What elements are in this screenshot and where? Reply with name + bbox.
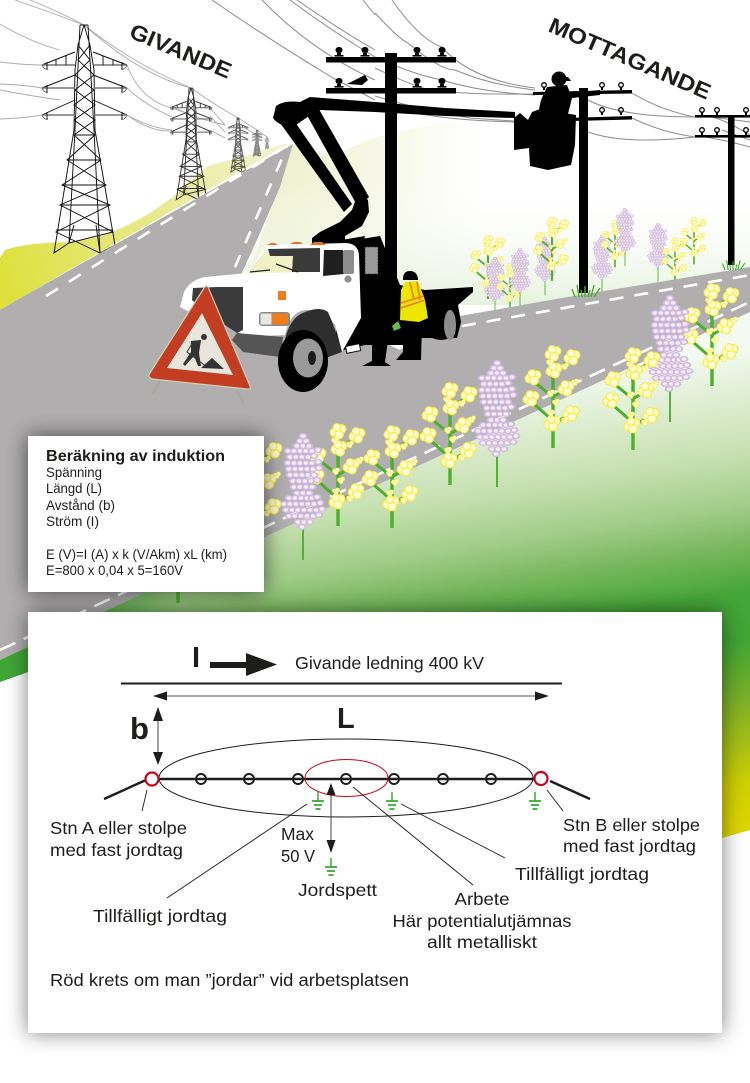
pole 3 with cross arms [695, 108, 750, 265]
list of quantities: Längd (L) [46, 480, 102, 496]
label: MOTTAGANDE: MOTTAGANDE [545, 13, 715, 104]
worker in safety vest [392, 271, 428, 360]
truck marker light [278, 291, 286, 300]
truck body behind cab [335, 236, 473, 352]
label b: b [130, 711, 149, 746]
station A [146, 772, 158, 786]
text: Arbete: allt metalliskt [427, 932, 537, 952]
truck rear wheel rim [444, 310, 456, 340]
leader lines [142, 787, 563, 898]
text: Stn B [563, 815, 700, 856]
panel: calculation shadow [28, 436, 264, 592]
small flowers behind the road [469, 208, 707, 315]
arrow: distance b [153, 707, 163, 765]
black induction loop [159, 739, 533, 817]
tower 2 [170, 88, 212, 200]
hill: pale green roadside on the right [240, 180, 750, 305]
tower 1 [42, 25, 127, 253]
tower 3 [228, 118, 248, 172]
tower 4 [252, 130, 262, 156]
truck grille [192, 287, 243, 333]
text: Stn B: med fast jordtag [563, 836, 696, 856]
formula: E (V)=I (A) x k (V/Akm) xL (km) [46, 546, 227, 562]
text: Stn A [50, 818, 187, 860]
text: Arbete [392, 889, 572, 952]
green ground at far left [0, 576, 180, 692]
pole 2 with cross arms [533, 83, 632, 293]
panel: diagram [28, 612, 722, 1033]
induced line with poles [104, 774, 590, 799]
text: max 50 V: 50 V [281, 846, 315, 866]
list of quantities: Spänning [46, 464, 102, 480]
bucket truck boom and arms [273, 97, 515, 250]
truck bumper [232, 333, 283, 357]
label: GIVANDE: GIVANDE [126, 19, 235, 83]
warning triangle sign [149, 286, 250, 407]
list of quantities [46, 464, 115, 529]
text: Stn A: med fast jordtag [50, 840, 183, 860]
power wires: transmission line [0, 0, 267, 138]
text: red circuit note: Röd krets om man ”jordar” vid arbetsplatsen [50, 970, 409, 990]
text: Givande ledning: Givande ledning 400 kV [295, 653, 484, 673]
formula: E=800 x 0,04 x 5=160V [46, 562, 184, 578]
conductor: givande ledning [121, 682, 562, 684]
text: temporary earth left: Tillfälligt jordtag [93, 906, 227, 926]
lineman in bucket [514, 72, 600, 170]
truck wheel arch [284, 309, 342, 360]
panel: diagram shadow [28, 612, 722, 1033]
list of quantities: Avstånd (b) [46, 497, 115, 513]
formula [46, 546, 227, 578]
road [0, 144, 750, 660]
truck headlight [259, 312, 290, 326]
hill: left yellow-green slope [0, 143, 290, 310]
large flowers along the road [148, 283, 740, 603]
arrow: current direction [210, 653, 277, 676]
road centre dashes [0, 144, 750, 650]
panel: calculation [28, 436, 264, 592]
worker on ground, black silhouette [362, 340, 391, 366]
green ground gradient [0, 312, 750, 838]
ground symbols [312, 792, 541, 875]
list of quantities: Ström (I) [46, 513, 99, 529]
text: max 50 V: Max [281, 824, 314, 844]
text: Arbete: Arbete [454, 889, 510, 909]
tower 5 [265, 137, 269, 148]
truck cargo mesh [365, 247, 378, 274]
grass at pole bases [572, 260, 745, 297]
pole 1 with cross arms [326, 47, 456, 293]
text: max 50 V [281, 824, 315, 866]
text: Stn A: Stn A eller stolpe [50, 818, 187, 838]
text: Jordspett: Jordspett [298, 880, 377, 900]
icon: man digging [183, 334, 224, 369]
text: temporary earth right: Tillfälligt jordtag [515, 864, 649, 884]
arrow: length L [153, 692, 549, 700]
current label I: I [192, 642, 200, 674]
station B [534, 772, 548, 785]
power wires: distribution line [212, 0, 750, 147]
truck cab [180, 243, 361, 352]
truck windows [247, 242, 354, 283]
text: Arbete: Här potentialutjämnas [392, 911, 572, 931]
truck front wheel [278, 330, 328, 392]
hill: pale slope behind truck [240, 120, 480, 300]
text: Stn B: Stn B eller stolpe [563, 815, 700, 835]
heading: Beräkning av induktion: Beräkning av induktion [46, 448, 225, 465]
red circuit loop [305, 760, 388, 796]
arrow: max voltage [326, 783, 336, 853]
label L: L [337, 703, 355, 735]
truck step [346, 344, 361, 353]
